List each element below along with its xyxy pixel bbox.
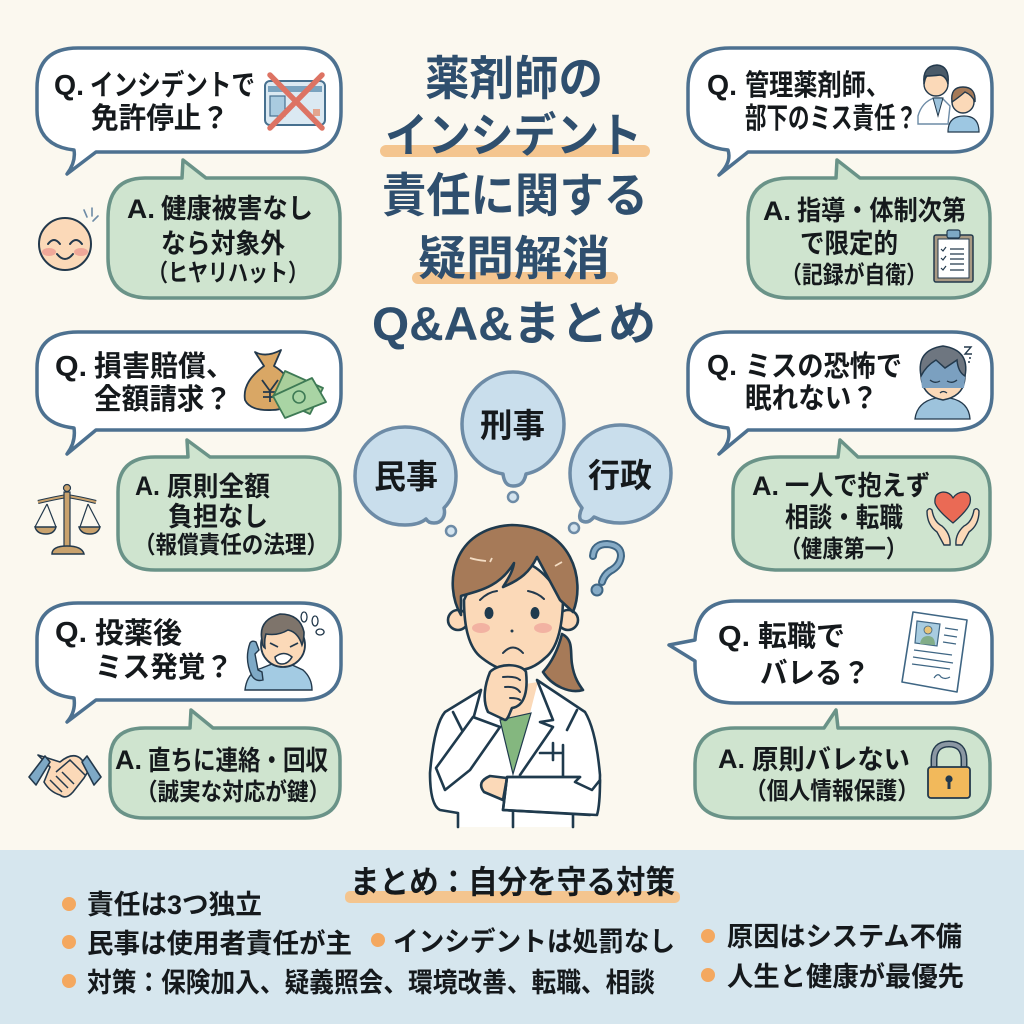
question text: 部下のミス責任？ xyxy=(745,102,917,135)
question text: ミスの恐怖で xyxy=(745,350,902,383)
answer text: で限定的 xyxy=(800,229,898,259)
summary bullets: 原因はシステム不備 xyxy=(727,922,962,952)
question text: Q. xyxy=(718,621,750,653)
icon: clipboard checklist xyxy=(934,230,973,282)
panel: A usually not discovered xyxy=(695,710,990,818)
summary bullets: 民事は使用者責任が主 xyxy=(87,928,352,959)
answer text: 相談・転職 xyxy=(785,503,903,533)
icon: sleepless person xyxy=(915,346,972,419)
icon: padlock xyxy=(928,744,970,798)
panel: A no full liability xyxy=(118,440,340,570)
summary bullets: 人生と健康が最優先 xyxy=(727,961,964,992)
face xyxy=(464,560,563,670)
neck and shirt xyxy=(488,682,538,720)
panel: A guidance and system xyxy=(748,160,990,298)
panel: Q changing jobs xyxy=(669,601,992,703)
question text: バレる？ xyxy=(760,658,870,690)
answer text: 原則バレない xyxy=(752,745,910,775)
answer text xyxy=(115,745,330,806)
answer text xyxy=(718,744,919,805)
thought bubble: civil: 民事 xyxy=(374,458,438,495)
panel: Q managing pharmacist xyxy=(688,48,992,175)
answer text: A. xyxy=(127,194,155,224)
panel: Q error after dispensing xyxy=(37,603,341,722)
title: Q&A&まとめ xyxy=(372,297,656,350)
icon: worried person on phone xyxy=(245,612,324,690)
thought bubble: criminal xyxy=(462,372,564,502)
hair xyxy=(453,525,577,615)
icon: balance scales xyxy=(35,484,100,554)
question text xyxy=(707,69,917,135)
coat outline, lapels and coat lines xyxy=(430,680,600,827)
answer text: 指導・体制次第 xyxy=(797,196,966,226)
answer text: 原則全額 xyxy=(167,472,270,502)
summary bullets: 対策：保険加入、疑義照会、環境改善、転職、相談 xyxy=(87,968,655,998)
question text: Q. xyxy=(707,70,737,102)
answer text: （健康第一） xyxy=(780,536,907,563)
summary band xyxy=(0,850,1024,1024)
panel: A seek help xyxy=(733,440,990,570)
answer text: A. xyxy=(135,471,160,501)
answer text: （個人情報保護） xyxy=(745,778,919,805)
answer text: A. xyxy=(718,744,745,774)
hand and arm xyxy=(436,717,500,790)
summary heading: まとめ：自分を守る対策 xyxy=(350,864,675,900)
panel: A no health harm xyxy=(108,160,340,298)
question text xyxy=(707,350,902,415)
answer text: 一人で抱えず xyxy=(785,471,930,501)
thought bubble: civil xyxy=(355,427,456,536)
question text: Q. xyxy=(54,70,84,102)
question text xyxy=(718,620,870,690)
title: 疑問解消 xyxy=(418,232,610,285)
answer text: （報償責任の法理） xyxy=(134,532,328,559)
question text: 免許停止？ xyxy=(91,102,229,135)
title: インシデント xyxy=(385,109,642,162)
icon: heart in hands xyxy=(927,492,979,545)
icon: crossed out license card xyxy=(265,75,325,128)
answer text: （ヒヤリハット） xyxy=(148,260,308,287)
icon: question mark xyxy=(592,544,621,596)
answer text xyxy=(763,196,966,289)
hand on chin xyxy=(485,665,527,720)
answer text: 直ちに連絡・回収 xyxy=(148,746,328,776)
question text: 転職で xyxy=(758,620,845,653)
icon: manager and staff xyxy=(918,65,979,132)
question text: 管理薬剤師、 xyxy=(745,69,890,102)
question text: インシデントで xyxy=(90,68,255,102)
question text: 損害賠償、 xyxy=(94,350,234,383)
question text: 投薬後 xyxy=(95,617,182,650)
lab coat xyxy=(430,680,600,827)
question text xyxy=(54,68,255,135)
thought bubble: administrative: 行政 xyxy=(588,457,652,494)
face features xyxy=(470,558,562,653)
icon: smiling face xyxy=(39,208,98,270)
answer text xyxy=(127,194,313,287)
ears xyxy=(448,610,468,630)
answer text: （記録が自衛） xyxy=(781,261,927,289)
summary bullets: インシデントは処罰なし xyxy=(393,926,675,957)
question text: ミス発覚？ xyxy=(95,651,233,684)
answer text xyxy=(752,471,930,563)
question text: Q. xyxy=(55,617,87,649)
answer text: A. xyxy=(115,745,142,775)
question text: Q. xyxy=(707,350,737,382)
question text xyxy=(55,617,233,684)
panel: Q fear of mistakes xyxy=(688,332,992,454)
question text: 全額請求？ xyxy=(94,383,232,416)
question text: Q. xyxy=(55,351,87,383)
question text: 眠れない？ xyxy=(745,383,878,415)
panel: A contact immediately xyxy=(110,710,340,818)
answer text: （誠実な対応が鍵） xyxy=(136,778,330,806)
answer text: A. xyxy=(763,196,791,226)
icon: resume document xyxy=(902,612,967,692)
title xyxy=(372,52,656,350)
panel: Q damages xyxy=(37,332,341,454)
answer text: なら対象外 xyxy=(161,229,285,259)
icon: handshake xyxy=(29,755,101,797)
icon: money bag and bills xyxy=(245,350,326,418)
pharmacist figure xyxy=(430,525,600,827)
summary bullets xyxy=(62,890,964,998)
answer text: 負担なし xyxy=(168,502,268,532)
answer text: A. xyxy=(752,471,779,501)
question text xyxy=(55,350,234,416)
summary bullets: 責任は3つ独立 xyxy=(87,890,262,920)
panel: Q license suspension xyxy=(37,48,341,174)
title: 薬剤師の xyxy=(425,52,603,105)
ponytail xyxy=(543,634,583,691)
answer text: 健康被害なし xyxy=(161,194,313,224)
answer text xyxy=(134,471,328,559)
thought bubble: criminal: 刑事 xyxy=(480,407,545,444)
title: 責任に関する xyxy=(382,169,648,222)
thought bubble: administrative xyxy=(569,425,671,533)
